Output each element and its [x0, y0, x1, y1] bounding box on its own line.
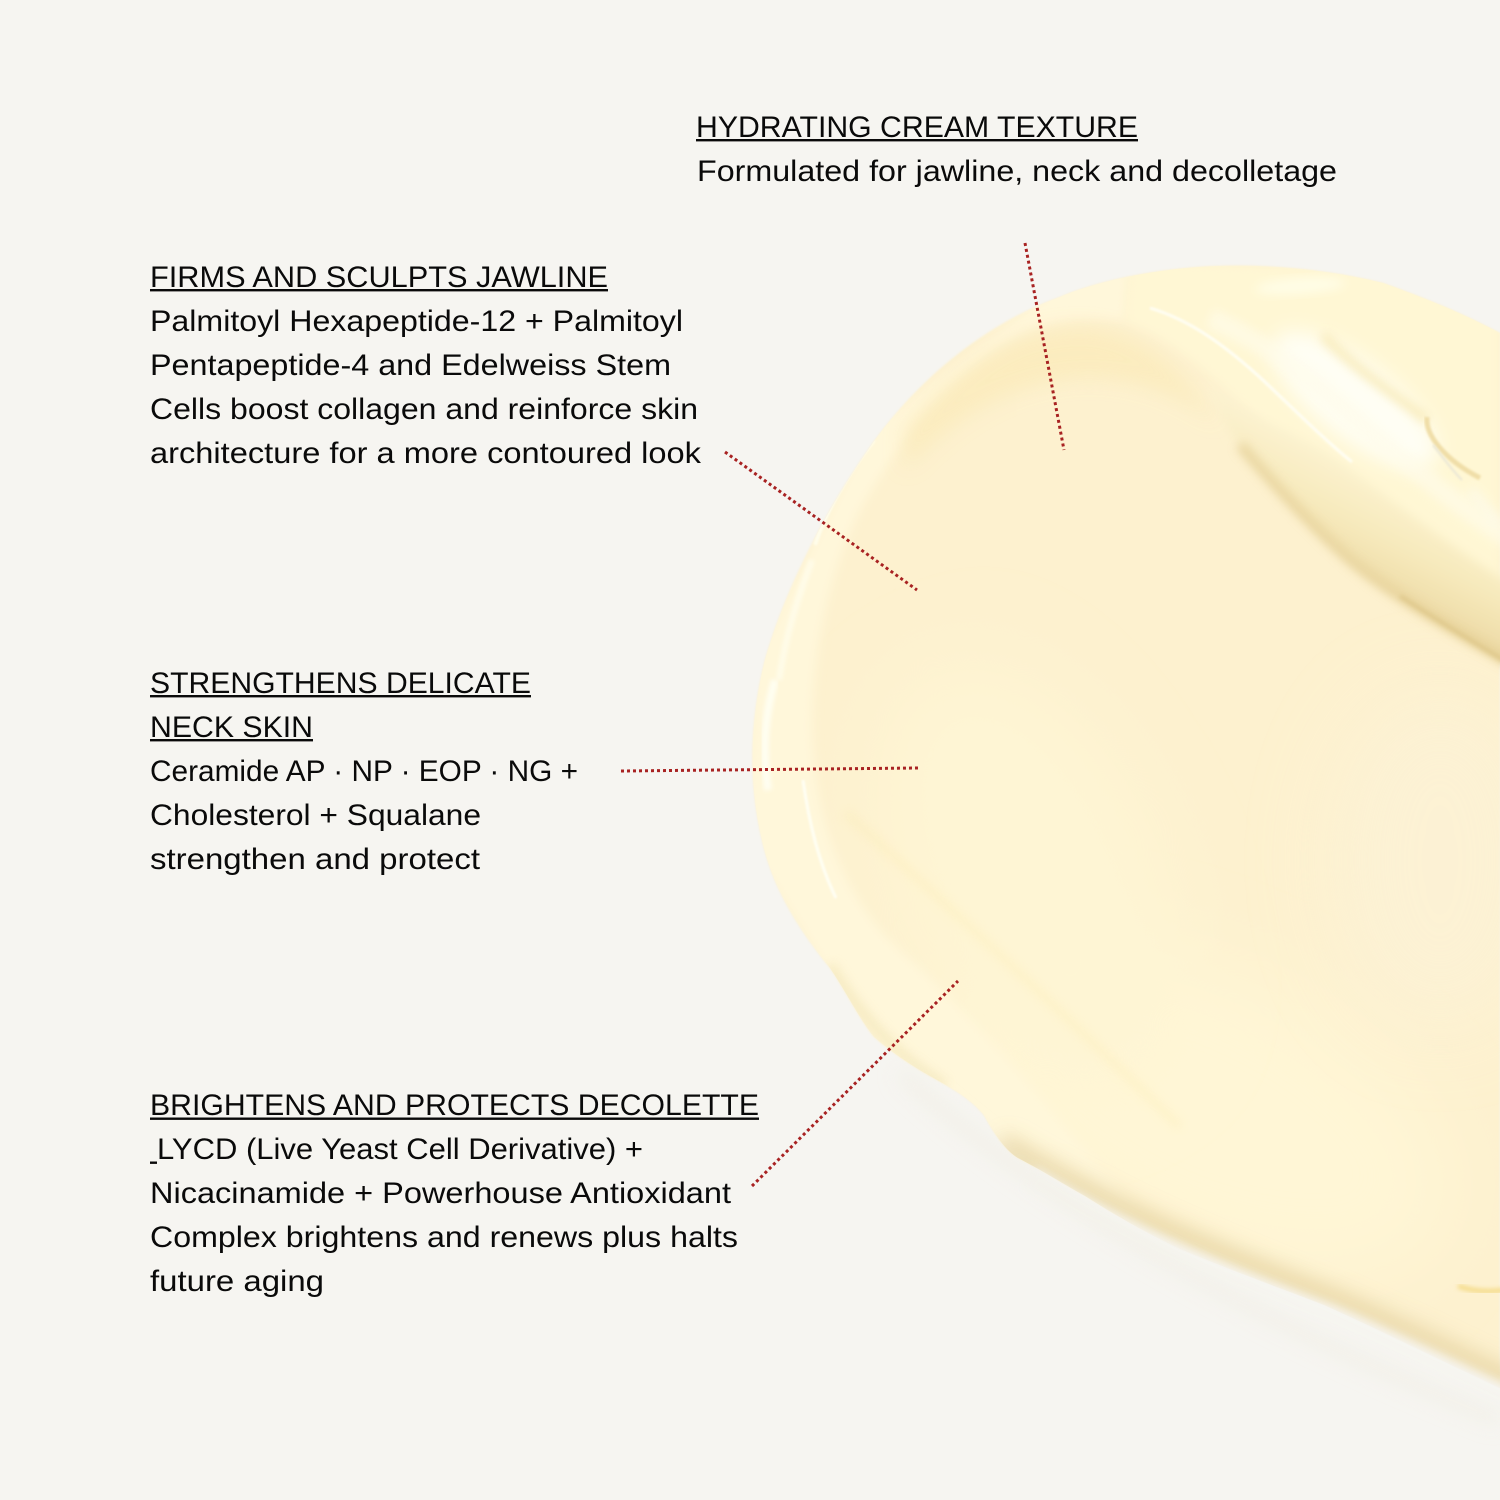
leader line: neck: [621, 768, 918, 771]
description: Cells boost collagen and reinforce skin: [150, 393, 698, 426]
crease band: [1250, 442, 1500, 665]
description: future aging: [150, 1265, 324, 1298]
description: architecture for a more contoured look: [150, 437, 702, 470]
heading: BRIGHTENS AND PROTECTS DECOLETTE: [150, 1089, 759, 1122]
heading: FIRMS AND SCULPTS JAWLINE: [150, 261, 608, 294]
heading: STRENGTHENS DELICATE: [150, 667, 531, 700]
crease dark edge: [1240, 445, 1500, 662]
text block: brightens and protects decolette: [150, 1089, 759, 1298]
heading: HYDRATING CREAM TEXTURE: [696, 111, 1138, 144]
leader line: texture: [1025, 243, 1064, 450]
description: Ceramide AP · NP · EOP · NG +: [150, 755, 578, 788]
description: Formulated for jawline, neck and decolletage: [697, 155, 1337, 188]
notch: [1427, 417, 1480, 478]
description: LYCD (Live Yeast Cell Derivative) +: [157, 1133, 643, 1166]
description: Cholesterol + Squalane: [150, 799, 481, 832]
heading: NECK SKIN: [150, 711, 313, 744]
cream shading: [745, 250, 1500, 1388]
soft fade along lower edge: [1030, 1178, 1500, 1404]
description: Complex brightens and renews plus halts: [150, 1221, 738, 1254]
description: strengthen and protect: [150, 843, 481, 876]
description: Nicacinamide + Powerhouse Antioxidant: [150, 1177, 732, 1210]
cream swatch: [745, 250, 1500, 1420]
description: [150, 305, 702, 470]
paler right field: [1330, 690, 1500, 1030]
secondary fold: [1323, 335, 1427, 420]
ridge glossy area: [1273, 326, 1441, 470]
small yellow streak: [1458, 1286, 1500, 1291]
lighter lower field: [896, 869, 1500, 1351]
leader line: jawline: [725, 452, 917, 590]
description: [150, 755, 578, 876]
upper ridge cream: [1136, 268, 1482, 324]
cream body: [753, 266, 1500, 1388]
lower edge shade: [1000, 1145, 1500, 1388]
inner lip shade: [900, 326, 1192, 455]
text block: firms and sculpts jawline: [150, 261, 702, 470]
description: Pentapeptide-4 and Edelweiss Stem: [150, 349, 671, 382]
rim left and top: [754, 280, 1123, 1088]
text block: strengthens delicate neck skin: [150, 667, 578, 876]
left rim highlights: [815, 440, 874, 545]
white streak: [1150, 308, 1352, 462]
heading: [150, 667, 531, 744]
inner fold line lower: [1138, 1088, 1172, 1119]
soft shadow beneath: [900, 1072, 1500, 1420]
text block: hydrating cream texture: [696, 111, 1337, 188]
leader line: decolette: [752, 981, 958, 1186]
description: [150, 1133, 738, 1298]
description: Palmitoyl Hexapeptide-12 + Palmitoyl: [150, 305, 683, 338]
